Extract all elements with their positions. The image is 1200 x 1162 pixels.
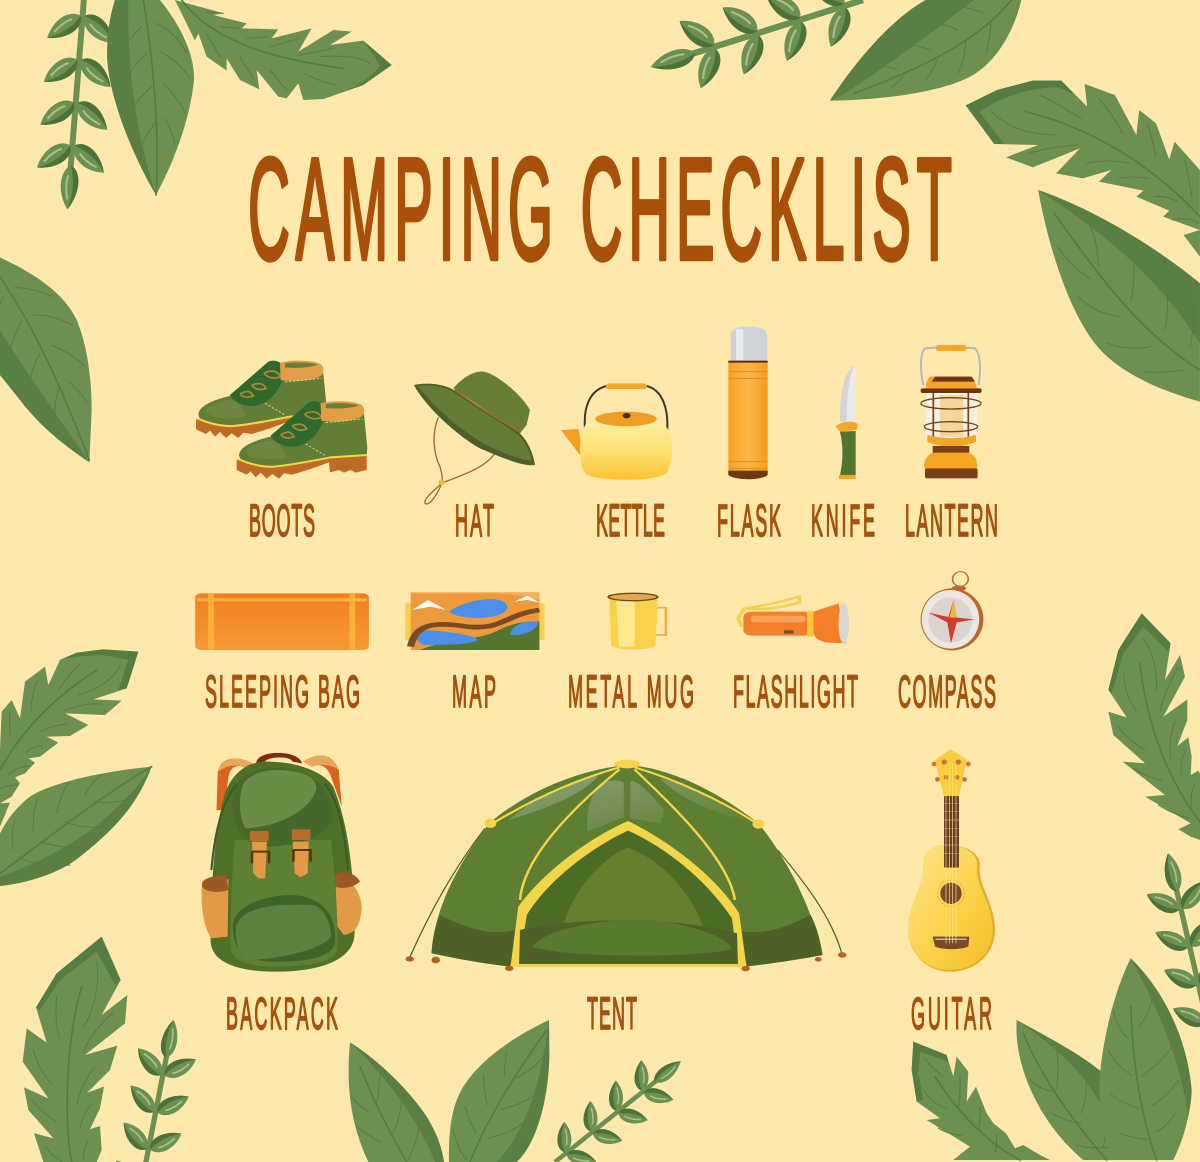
foliage: top-left leaf — [107, 0, 194, 195]
foliage: bottom-left fern — [23, 937, 127, 1162]
label: boots: BOOTS — [249, 497, 315, 547]
item: metal mug — [608, 593, 666, 649]
label: lantern: LANTERN — [905, 497, 998, 547]
foliage: top-left sprig — [28, 0, 123, 212]
item: kettle — [561, 383, 672, 480]
foliage: top-left fern — [175, 0, 392, 100]
title: CAMPING CHECKLIST — [248, 129, 952, 291]
item: hat — [414, 371, 535, 504]
item: backpack — [202, 753, 362, 972]
label: knife: KNIFE — [811, 497, 875, 547]
item: sleeping bag — [195, 593, 369, 650]
foliage: bottom leaf left — [349, 1042, 444, 1162]
label: backpack: BACKPACK — [226, 990, 338, 1040]
foliage: bottom-right leaves and fern — [912, 958, 1192, 1160]
foliage: left fern — [0, 649, 138, 827]
item: tent — [405, 760, 846, 971]
label: guitar: GUITAR — [911, 990, 992, 1040]
foliage: top sprig — [638, 0, 875, 106]
label: kettle: KETTLE — [596, 497, 665, 547]
label: tent: TENT — [587, 990, 637, 1040]
label: flashlight: FLASHLIGHT — [733, 668, 858, 718]
foliage: top-right leaf, fern and big leaf — [830, 0, 1200, 402]
label: hat: HAT — [455, 497, 494, 547]
label: sleeping bag: SLEEPING BAG — [205, 668, 360, 718]
label: map: MAP — [452, 668, 496, 718]
item: boots — [196, 361, 367, 479]
foliage: right lower fern — [1108, 613, 1200, 840]
item: compass — [921, 572, 983, 650]
foliage: bottom leaf right — [449, 1020, 549, 1162]
foliage: bottom-right tall leaf — [1100, 958, 1192, 1160]
foliage: bottom-left sprig — [104, 1013, 207, 1162]
foliage: bottom-right wide leaf — [1016, 1020, 1147, 1160]
foliage: left leaf — [0, 257, 92, 462]
label: compass: COMPASS — [898, 668, 996, 718]
item: flask — [728, 327, 768, 479]
foliage: right sprig — [1134, 845, 1200, 1047]
foliage: top-right leaf — [830, 0, 1021, 101]
foliage: bottom sprig — [536, 1038, 699, 1162]
label: metal mug: METAL MUG — [568, 668, 694, 718]
item: guitar — [908, 749, 995, 972]
foliage: right big leaf — [1038, 190, 1200, 402]
item: lantern — [921, 345, 982, 478]
item: knife — [836, 365, 858, 479]
item: map — [405, 592, 545, 650]
foliage: right fern — [966, 81, 1200, 257]
foliage: bottom leaves — [349, 1020, 549, 1162]
item: flashlight — [738, 597, 849, 643]
foliage: bottom-right fern — [912, 1042, 1050, 1160]
foliage: lower-left leaf — [0, 767, 152, 886]
label: flask: FLASK — [717, 497, 781, 547]
